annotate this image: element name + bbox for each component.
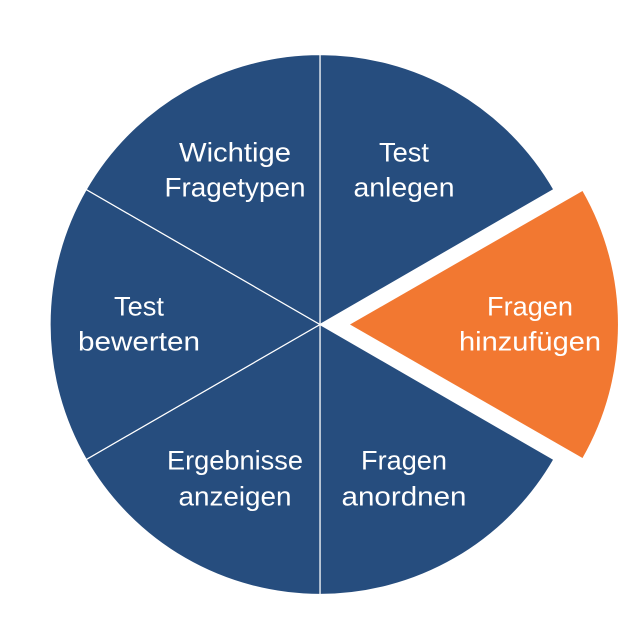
segment: Fragen hinzufügen (highlighted): Fragen (487, 292, 573, 322)
segment: Fragen anordnen: anordnen (342, 482, 466, 512)
segment: Test anlegen: anlegen (354, 172, 454, 202)
segment: Ergebnisse anzeigen: anzeigen (178, 482, 292, 512)
segment: Fragen hinzufügen (highlighted) (350, 191, 618, 458)
segment: Fragen hinzufügen (highlighted): hinzufügen (459, 326, 601, 356)
segment: Wichtige Fragetypen: Fragetypen (164, 172, 306, 202)
segment: Ergebnisse anzeigen: Ergebnisse (167, 446, 303, 476)
segment: Ergebnisse anzeigen (86, 324, 320, 594)
segment: Fragen anordnen (320, 324, 554, 594)
segment: Fragen anordnen: Fragen (361, 446, 447, 476)
segment: Test bewerten (50, 190, 320, 460)
segment: Wichtige Fragetypen (86, 54, 320, 324)
segment: Wichtige Fragetypen: Wichtige (179, 138, 291, 168)
segment: Test bewerten: Test (114, 292, 164, 322)
segment: Test bewerten: bewerten (78, 326, 200, 356)
segment: Test anlegen (320, 54, 554, 324)
segment: Test anlegen: Test (379, 138, 429, 168)
